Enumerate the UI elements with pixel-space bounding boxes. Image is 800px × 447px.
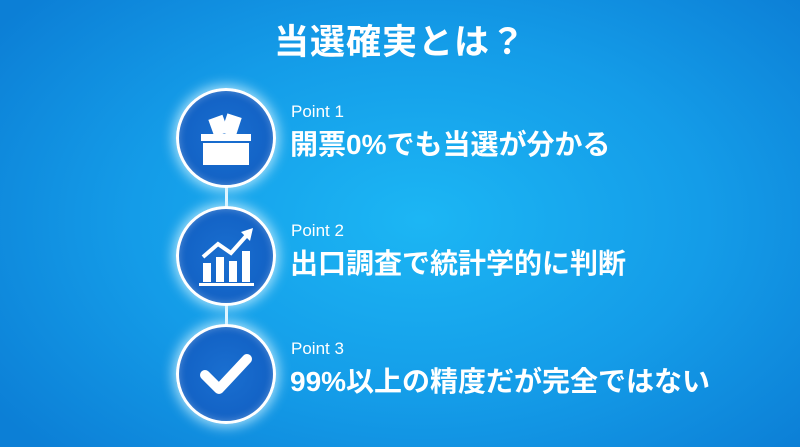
connector line 2 <box>225 302 228 326</box>
point 2 text <box>290 221 626 279</box>
text: Point 2 <box>291 221 344 240</box>
connector line 1 <box>225 184 228 208</box>
text: 開票0%でも当選が分かる <box>290 129 610 160</box>
point 1 text <box>290 102 610 160</box>
text: 出口調査で統計学的に判断 <box>290 248 626 279</box>
text: 99%以上の精度だが完全ではない <box>290 366 710 397</box>
title: 当選確実とは？ <box>274 23 526 62</box>
text: Point 3 <box>291 339 344 358</box>
icon: checkmark <box>176 324 276 424</box>
icon: chart <box>176 206 276 306</box>
point 3 text <box>290 339 710 397</box>
icon: ballot box <box>176 88 276 188</box>
text: Point 1 <box>291 102 344 121</box>
